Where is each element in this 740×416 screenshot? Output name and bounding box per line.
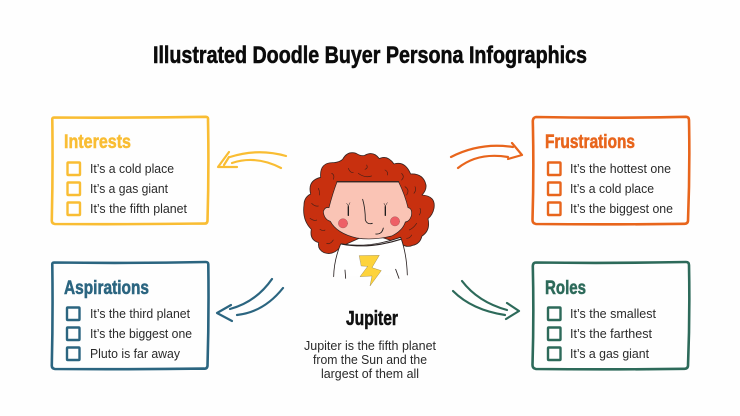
hair curls [310,165,421,244]
panel: interests [52,117,208,224]
title: Illustrated Doodle Buyer Persona Infographics [153,42,587,69]
checklist: interests: It’s the fifth planet [90,202,188,216]
persona name: Jupiter [346,308,398,330]
heading: frustrations: Frustrations [545,132,635,153]
checklist: roles: It’s a gas giant [570,347,650,361]
panel: aspirations [52,262,209,369]
checklist: aspirations: It’s the third planet [90,307,191,321]
face [323,182,412,239]
heading: interests: Interests [64,132,131,153]
collar [342,239,401,246]
panel: roles [532,262,689,369]
checklist: frustrations: It’s the hottest one [570,162,671,176]
lightning bolt [359,255,381,286]
checklist: frustrations [548,162,673,216]
heading: aspirations: Aspirations [64,278,149,299]
checklist: frustrations: It’s a cold place [570,182,654,196]
checklist: frustrations: It’s the biggest one [570,202,673,216]
persona description: from the Sun and the [313,353,427,367]
persona description [304,339,437,381]
checklist: interests: It’s a cold place [90,162,174,176]
persona description: largest of them all [321,367,419,381]
arrow: to aspirations [217,279,283,321]
arrow: to frustrations [451,143,522,168]
illustration: persona character [304,153,434,286]
checklist: interests [68,162,188,216]
shirt [334,237,407,277]
hair [304,153,434,254]
panel: frustrations [532,117,689,224]
checklist: aspirations [67,307,192,361]
checklist: interests: It’s a gas giant [90,182,168,196]
arrow: to roles [453,281,519,319]
heading: roles: Roles [545,278,586,299]
checklist: roles: It’s the smallest [570,307,657,321]
arrow: to interests [218,152,286,168]
checklist: aspirations: Pluto is far away [90,347,181,361]
persona description: Jupiter is the fifth planet [304,339,437,353]
checklist: roles [548,307,657,361]
cheeks [338,219,348,228]
eyes and nose [348,207,385,215]
checklist: aspirations: It’s the biggest one [90,327,192,341]
checklist: roles: It’s the farthest [570,327,653,341]
